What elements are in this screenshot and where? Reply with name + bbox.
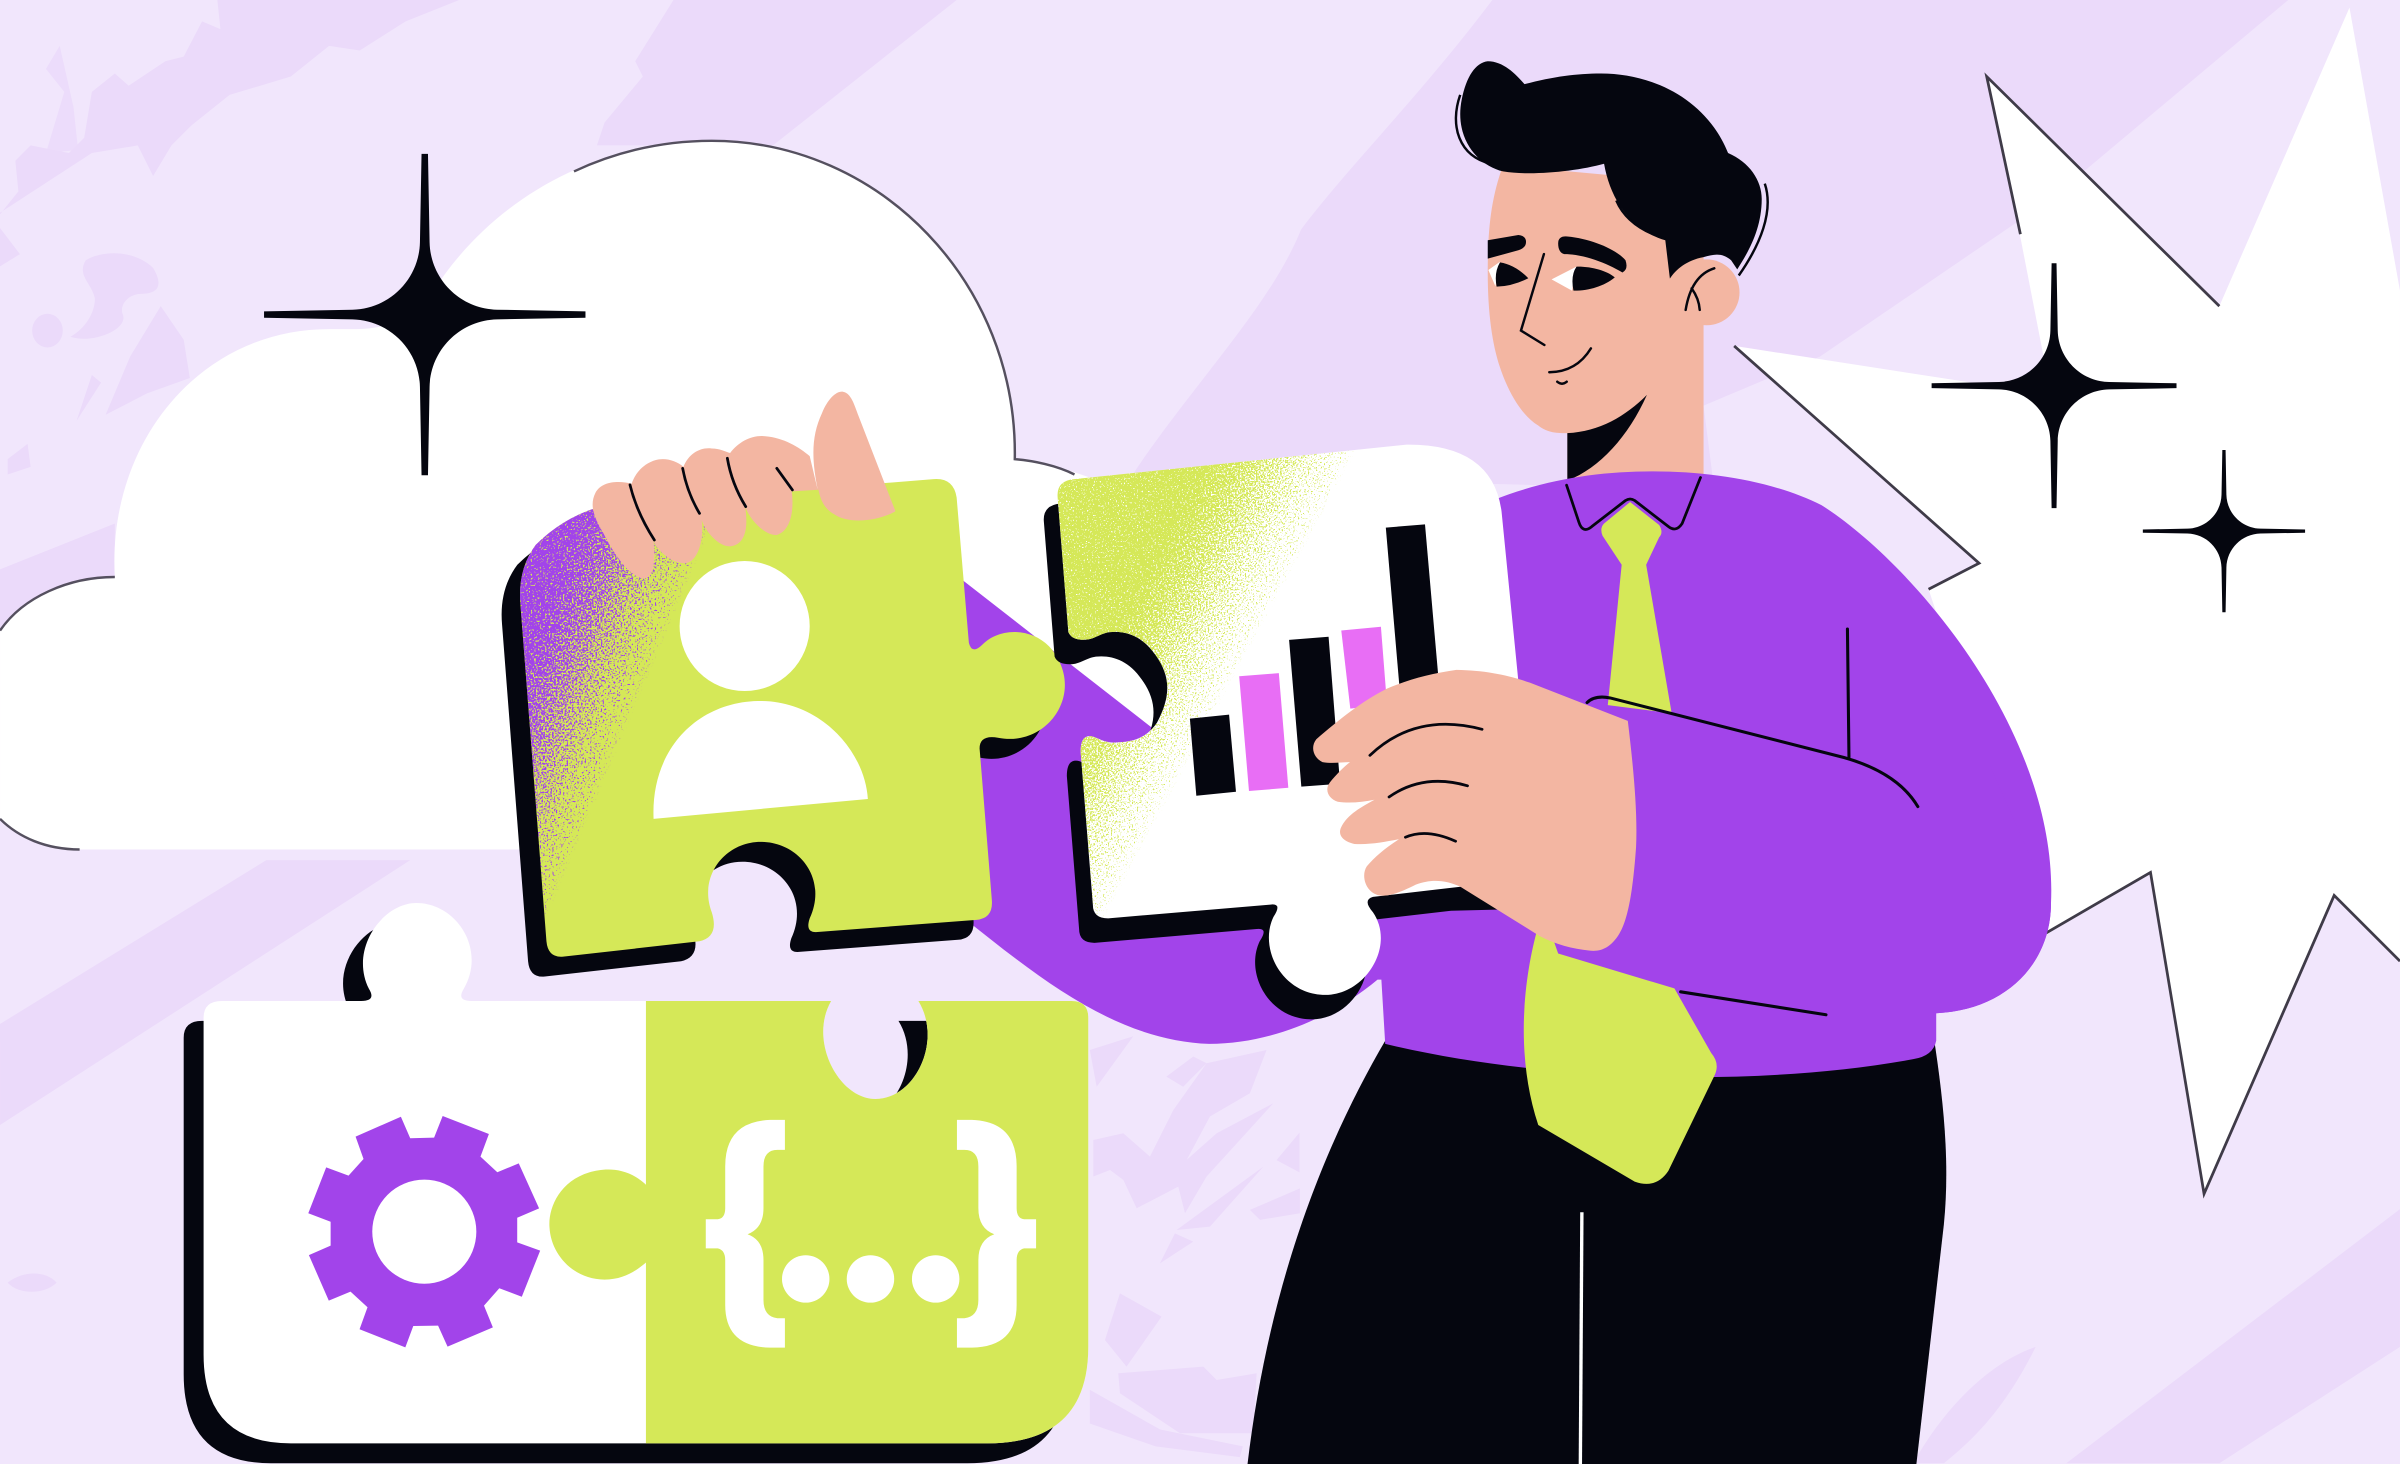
white body xyxy=(1058,445,1531,995)
left hand xyxy=(593,392,895,579)
shadow xyxy=(184,923,1068,1463)
user icon xyxy=(653,561,868,819)
shirt collar xyxy=(1567,478,1700,529)
ear xyxy=(1674,259,1740,325)
purple speckle xyxy=(520,508,708,916)
left puzzle piece xyxy=(502,459,1065,980)
bottom puzzle piece xyxy=(184,903,1088,1463)
face xyxy=(1488,165,1704,490)
starburst xyxy=(1734,8,2400,1194)
hair xyxy=(1460,61,1762,279)
cloud xyxy=(0,141,1224,857)
green speckle xyxy=(1058,450,1354,917)
trousers xyxy=(1247,1033,1946,1464)
nose, mouth, ear lines xyxy=(1521,254,1714,384)
tie xyxy=(1524,502,1717,1184)
arm behind pieces xyxy=(957,575,1469,1044)
code braces icon xyxy=(706,1120,1036,1348)
white half xyxy=(204,903,1088,1443)
shadow xyxy=(1044,469,1517,1019)
sparkle right small xyxy=(2143,450,2305,612)
green tab xyxy=(549,1170,647,1280)
sparkle left xyxy=(264,154,585,475)
gear icon xyxy=(308,1116,540,1347)
beard shadow xyxy=(1567,395,1647,481)
green half xyxy=(646,1001,1088,1443)
sparkle right large xyxy=(1932,263,2177,508)
green body xyxy=(520,479,1065,957)
neck and head xyxy=(1456,61,1768,490)
sleeve xyxy=(1546,629,2051,1016)
shadow xyxy=(502,499,1047,977)
eyes xyxy=(1488,262,1577,291)
eyebrows xyxy=(1488,235,1627,272)
bar chart xyxy=(1190,524,1438,796)
right puzzle piece xyxy=(1044,436,1531,1019)
right hand xyxy=(1313,670,1636,951)
shirt xyxy=(1378,471,2051,1077)
